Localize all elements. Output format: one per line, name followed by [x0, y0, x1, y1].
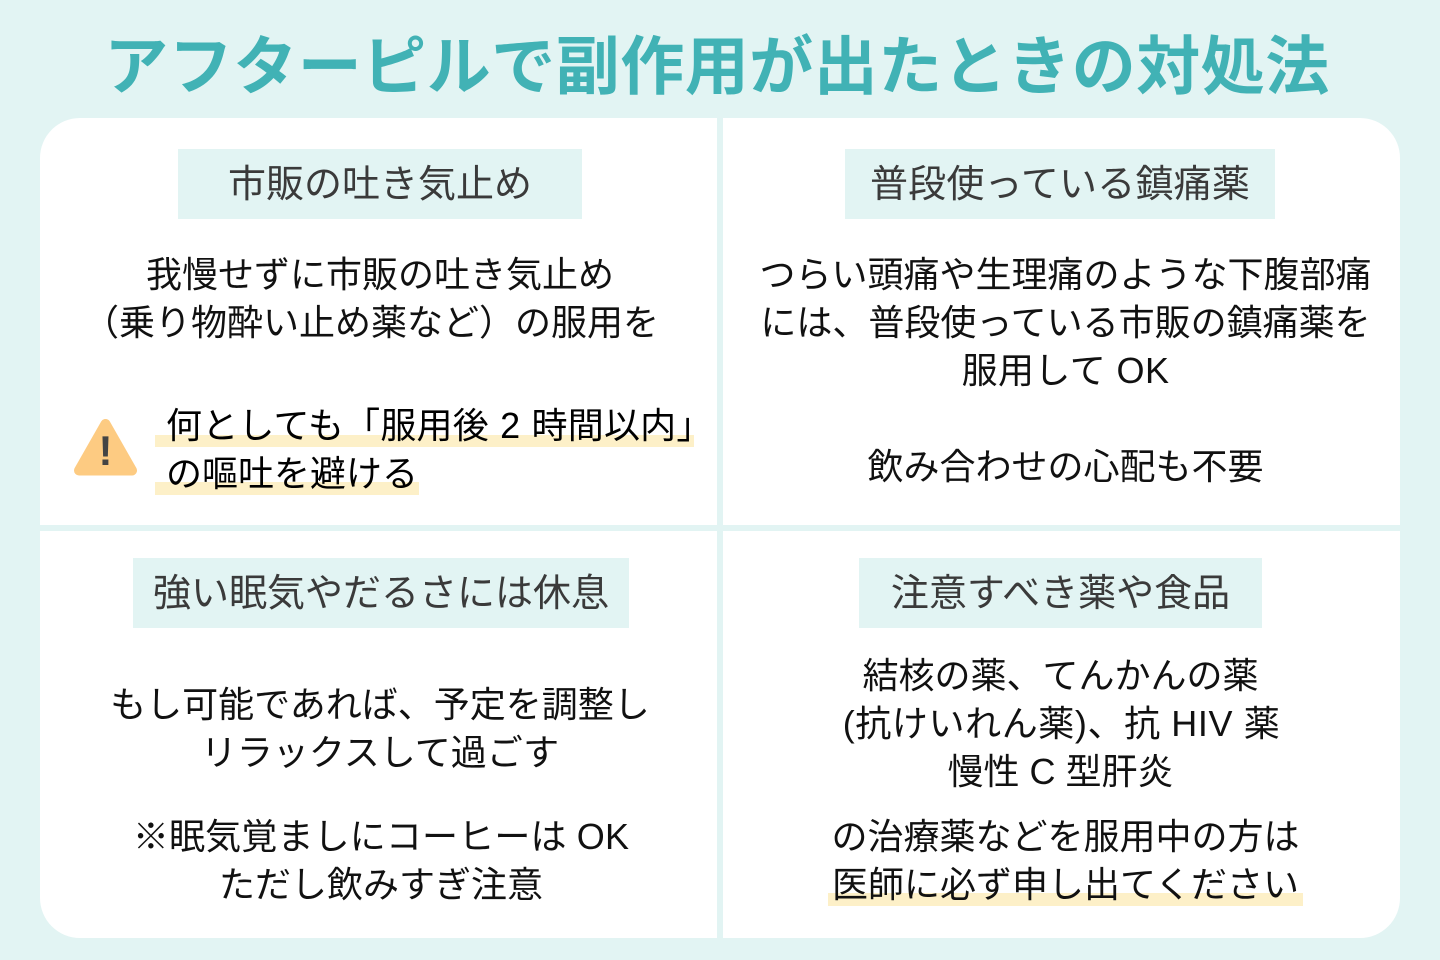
text: adjust schedule: [110, 684, 650, 773]
text: painkiller advice: 服用して OK: [962, 350, 1169, 391]
icon: warning triangle: !: [98, 427, 112, 474]
panel: drugs and foods to watch: [828, 558, 1303, 906]
text: adjust schedule: もし可能であれば、予定を調整し: [110, 684, 650, 725]
callout: avoid vomiting within 2 hours: 何としても「服用後 2 時間以内」: [166, 405, 713, 446]
icon: warning triangle: [74, 419, 137, 476]
panel: usual painkiller: [759, 149, 1372, 487]
heading: rest for drowsiness: 強い眠気やだるさには休息: [153, 573, 609, 615]
text: coffee note: ※眠気覚ましにコーヒーは OK: [133, 816, 629, 857]
panel: rest for drowsiness: [110, 558, 650, 905]
text: consult doctor: [828, 816, 1303, 906]
text: take antiemetic: [83, 254, 659, 343]
text: drug list: 結核の薬、てんかんの薬: [862, 655, 1258, 696]
text: take antiemetic: （乗り物酔い止め薬など）の服用を: [83, 302, 659, 343]
text: painkiller advice: には、普段使っている市販の鎮痛薬を: [760, 302, 1371, 343]
text: painkiller advice: [759, 254, 1372, 391]
heading: rest for drowsiness: [133, 558, 629, 628]
text: drug list: 慢性 C 型肝炎: [947, 751, 1174, 792]
heading: usual painkiller: 普段使っている鎮痛薬: [870, 164, 1250, 206]
text: drug list: [843, 655, 1280, 792]
heading: over-the-counter antiemetic: 市販の吐き気止め: [228, 164, 532, 206]
heading: drugs and foods to watch: [859, 558, 1262, 628]
title: アフターピルで副作用が出たときの対処法: [104, 31, 1330, 103]
panel: over-the-counter antiemetic: [74, 149, 713, 495]
text: adjust schedule: リラックスして過ごす: [201, 732, 559, 773]
callout: avoid vomiting within 2 hours: [155, 405, 713, 495]
callout: avoid vomiting within 2 hours: の嘔吐を避ける: [166, 453, 418, 494]
text: consult doctor: 医師に必ず申し出てください: [832, 864, 1299, 905]
text: take antiemetic: 我慢せずに市販の吐き気止め: [146, 254, 614, 295]
text: consult doctor: の治療薬などを服用中の方は: [831, 816, 1300, 857]
text: coffee note: ただし飲みすぎ注意: [219, 864, 543, 905]
heading: over-the-counter antiemetic: [178, 149, 582, 219]
heading: drugs and foods to watch: 注意すべき薬や食品: [891, 573, 1230, 615]
highlight: line 2: [155, 482, 419, 495]
text: painkiller advice: つらい頭痛や生理痛のような下腹部痛: [759, 254, 1372, 295]
text: no interaction worry: 飲み合わせの心配も不要: [867, 446, 1264, 487]
highlight: consult doctor: [828, 893, 1303, 906]
text: drug list: (抗けいれん薬)、抗 HIV 薬: [843, 703, 1280, 744]
text: coffee note: [133, 816, 629, 905]
heading: usual painkiller: [845, 149, 1275, 219]
highlight: line 1: [155, 435, 694, 447]
